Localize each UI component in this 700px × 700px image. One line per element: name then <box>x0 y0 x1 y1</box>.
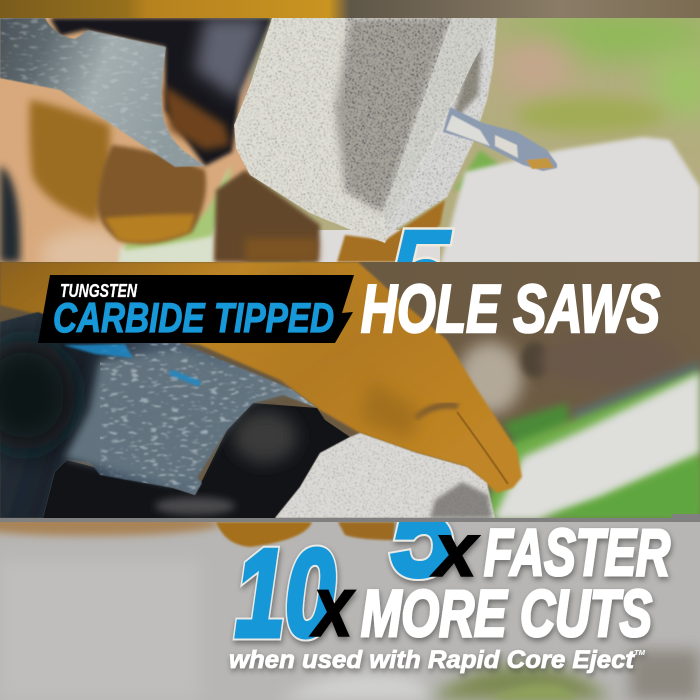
glove fragments <box>216 522 395 547</box>
saw dark interior <box>43 403 350 518</box>
brick back side <box>384 18 498 244</box>
brick <box>275 432 495 518</box>
photo panel 1: drill bit through brick <box>0 18 700 262</box>
caption: when used with rapid core eject: TM <box>634 650 645 657</box>
glove fingers <box>29 100 445 262</box>
claim: 10x more cuts <box>235 525 652 663</box>
background blurs <box>430 665 610 700</box>
small heading: tungsten: TUNGSTEN <box>60 281 138 301</box>
claim: 10x more cuts: 10 <box>235 525 335 663</box>
claim: 10x more cuts: 10 <box>235 525 335 663</box>
blue heading: carbide tipped: CARBIDE TIPPED <box>53 294 334 341</box>
big number 5 (top slice): 5 <box>387 203 453 344</box>
blurred concrete slab in background <box>440 137 700 265</box>
photo panel 3: concrete background <box>0 512 700 700</box>
claim: 5x faster: 5 <box>391 462 457 603</box>
claim: 5x faster <box>386 522 675 588</box>
brick front face <box>234 18 498 244</box>
bottom grey divider bar <box>0 518 700 522</box>
hole saw dark interior <box>50 18 272 166</box>
caption: when used with rapid core eject: when used with Rapid Core Eject <box>229 646 636 674</box>
top band: glove and background strip <box>0 0 700 18</box>
hole saw body <box>0 312 320 518</box>
photo panel 2: hole saw in glove <box>0 262 700 520</box>
claim: 5x faster: x <box>430 508 480 593</box>
headline badge: tungsten carbide tipped <box>38 275 354 343</box>
claim: 10x more cuts: x <box>310 559 356 655</box>
drill bit <box>443 107 557 171</box>
hole saw steel body <box>0 18 210 168</box>
claim: 5x faster: 5 <box>391 462 457 603</box>
background blur: green foliage and peach <box>0 9 700 280</box>
glove <box>0 262 522 493</box>
background blur <box>0 262 700 520</box>
grey divider tab at right <box>672 514 700 522</box>
